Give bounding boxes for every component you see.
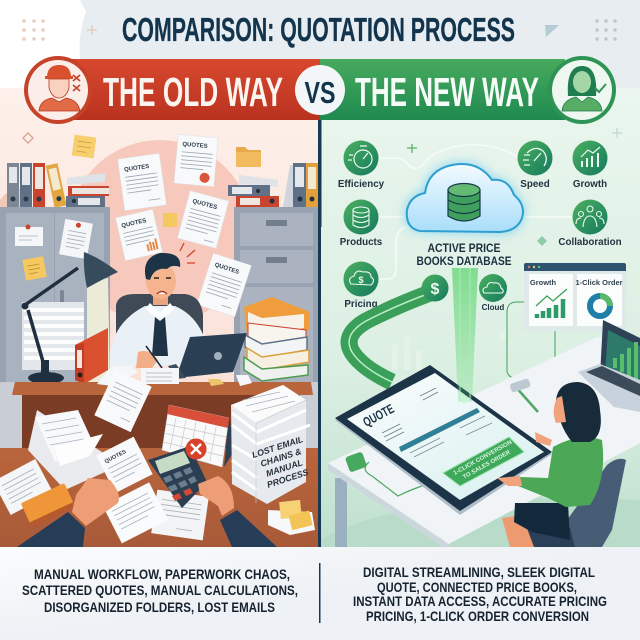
- desk: [0, 382, 319, 547]
- banner: the new way: [320, 56, 616, 124]
- label: the new way: THE NEW WAY: [355, 69, 539, 115]
- connector dashboard to desk: [507, 302, 555, 382]
- connector lines: [378, 145, 573, 279]
- icon: efficiency: [344, 140, 378, 176]
- text: new way summary: QUOTE, CONNECTED PRICE BOOKS,: [377, 579, 577, 595]
- document: quotes C: QUOTES: [192, 199, 218, 211]
- backdrop circle: [68, 140, 252, 324]
- label: speed: Speed: [520, 179, 550, 190]
- document: quotes C: [177, 191, 229, 248]
- document: quotes E: [197, 253, 251, 317]
- text: old way summary: [22, 566, 298, 615]
- tablet: [335, 365, 552, 515]
- icon: products: [344, 200, 378, 234]
- document: quotes on desk: [96, 437, 153, 493]
- plus: [612, 128, 622, 138]
- binders right: [283, 163, 318, 207]
- label: quote: QUOTE: [360, 401, 397, 430]
- bottom shading: [321, 498, 640, 547]
- chair back: [116, 294, 203, 345]
- cloud database: [407, 164, 523, 232]
- faint bars behind: [395, 330, 503, 370]
- label: collaboration: Collaboration: [558, 237, 622, 248]
- loose paper left: [0, 459, 53, 515]
- label: lost email chains: LOST EMAIL: [251, 434, 304, 460]
- cabinet right: [234, 207, 319, 382]
- label: growth: Growth: [573, 179, 607, 190]
- chair: [515, 459, 626, 547]
- document: quotes B: QUOTES: [182, 142, 208, 150]
- document: quotes D: QUOTES: [121, 218, 147, 230]
- label: efficiency: Efficiency: [338, 179, 385, 190]
- button: 1-click conversion: 1-CLICK CONVERSION: [453, 440, 513, 477]
- icon: employee badge: [548, 56, 616, 124]
- document: quotes A: QUOTES: [124, 164, 150, 173]
- label: lost email chains: MANUAL: [265, 457, 304, 479]
- banner: the old way: [24, 56, 320, 124]
- red binder: [75, 328, 108, 384]
- divider: [319, 563, 320, 623]
- icon: worker badge: [24, 56, 92, 124]
- text: new way summary: [353, 564, 607, 624]
- vs badge: VS: [304, 75, 336, 110]
- vs badge: [295, 65, 345, 115]
- document on desk edge: [94, 370, 152, 432]
- donut chart: [590, 296, 610, 316]
- icon: diamond: [23, 133, 33, 143]
- icon: database: [448, 184, 480, 221]
- label: active price books database: [416, 241, 512, 268]
- icon: red x badge: [186, 438, 206, 460]
- quote table: [399, 408, 480, 452]
- panel: bottom summary: [0, 547, 640, 640]
- label: products: Products: [340, 237, 383, 248]
- decor diamond: [537, 236, 547, 246]
- button: 1-click conversion: [443, 437, 524, 486]
- right hand and arm: [198, 476, 277, 547]
- stylus and hub: [509, 378, 538, 412]
- label: lost email chains: [251, 434, 315, 491]
- label: active price books database: BOOKS DATABASE: [416, 254, 512, 268]
- paper stack under lamp: [22, 302, 84, 370]
- text: old way summary: MANUAL WORKFLOW, PAPERWORK CHAOS,: [34, 566, 290, 582]
- label: lost email chains: PROCESS: [266, 467, 310, 490]
- center divider lower: [318, 227, 321, 547]
- stress marks: [180, 243, 195, 263]
- chip and cable: [345, 451, 422, 496]
- calculator: [148, 446, 207, 508]
- label: the old way: THE OLD WAY: [103, 69, 283, 115]
- document: quotes B: [174, 134, 218, 187]
- document: quotes on desk: QUOTES: [104, 449, 128, 465]
- sticky small: [163, 213, 177, 227]
- lamp glow: [87, 278, 110, 382]
- desk surface: [328, 337, 640, 547]
- text: old way summary: SCATTERED QUOTES, MANUAL CALCULATIONS,: [22, 582, 298, 598]
- icon: collaboration: [572, 200, 608, 234]
- bar chart: [536, 289, 567, 318]
- decor plus: [407, 144, 417, 153]
- label: cloud: Cloud: [482, 303, 504, 312]
- desk papers top: [97, 366, 252, 386]
- laptop: [168, 333, 247, 379]
- label: lost email chains: CHAINS &: [259, 446, 303, 469]
- label: pricing: Pricing: [344, 299, 378, 310]
- binder stack right: [244, 297, 310, 381]
- panel: the old way: [0, 88, 319, 548]
- document: quotes E: QUOTES: [214, 262, 240, 276]
- label: active price books database: ACTIVE PRICE: [428, 241, 500, 255]
- text: old way summary: DISORGANIZED FOLDERS, LOST EMAILS: [44, 599, 275, 615]
- icon: speed: [518, 140, 552, 176]
- icon: pricing: $: [358, 275, 364, 285]
- woman: [497, 382, 603, 547]
- orange folder: [21, 483, 75, 527]
- text: new way summary: DIGITAL STREAMLINING, SLEEK DIGITAL: [363, 564, 595, 580]
- left paper pile: [28, 410, 105, 490]
- worker: [110, 253, 210, 368]
- data beam: [452, 268, 478, 404]
- button: 1-click conversion: TO SALES ORDER: [462, 449, 512, 481]
- label: growth: Growth: [530, 278, 557, 287]
- stacked binders right: [228, 175, 279, 207]
- dashboard window: [524, 263, 626, 331]
- icon: growth: [572, 140, 608, 176]
- calendar: [162, 405, 235, 467]
- cloud glow: [407, 164, 523, 232]
- text: new way summary: PRICING, 1-CLICK ORDER CONVERSION: [366, 608, 589, 624]
- icon: cloud badge: [479, 274, 507, 302]
- icon: dollar badge: [422, 274, 448, 302]
- icon: dollar badge: $: [431, 281, 440, 298]
- document: quotes A: [118, 153, 166, 211]
- cabinet left: [0, 207, 110, 382]
- panel: the new way: [321, 88, 640, 548]
- header background: [0, 0, 640, 90]
- paper stack with label: [231, 385, 315, 504]
- document: quotes D: [116, 209, 162, 261]
- desk lamp: [22, 252, 118, 384]
- text details: [382, 388, 438, 441]
- pinned notes on cabinet: [15, 219, 93, 281]
- binders left: [7, 163, 66, 208]
- green ribbon: [349, 293, 430, 382]
- icon: pricing: [344, 262, 378, 296]
- sticky note: [72, 135, 96, 158]
- stacked binders left: [66, 173, 109, 207]
- left hand and arm: [17, 478, 119, 547]
- laptop right: [578, 320, 640, 412]
- icon: folder: [236, 147, 261, 167]
- papers center front: [103, 482, 209, 543]
- decorations: dots and marks: [22, 19, 617, 41]
- sticky notes on paper, lower right: [268, 500, 315, 535]
- label: 1-click order: 1-Click Order: [575, 278, 623, 287]
- center divider: [318, 60, 322, 227]
